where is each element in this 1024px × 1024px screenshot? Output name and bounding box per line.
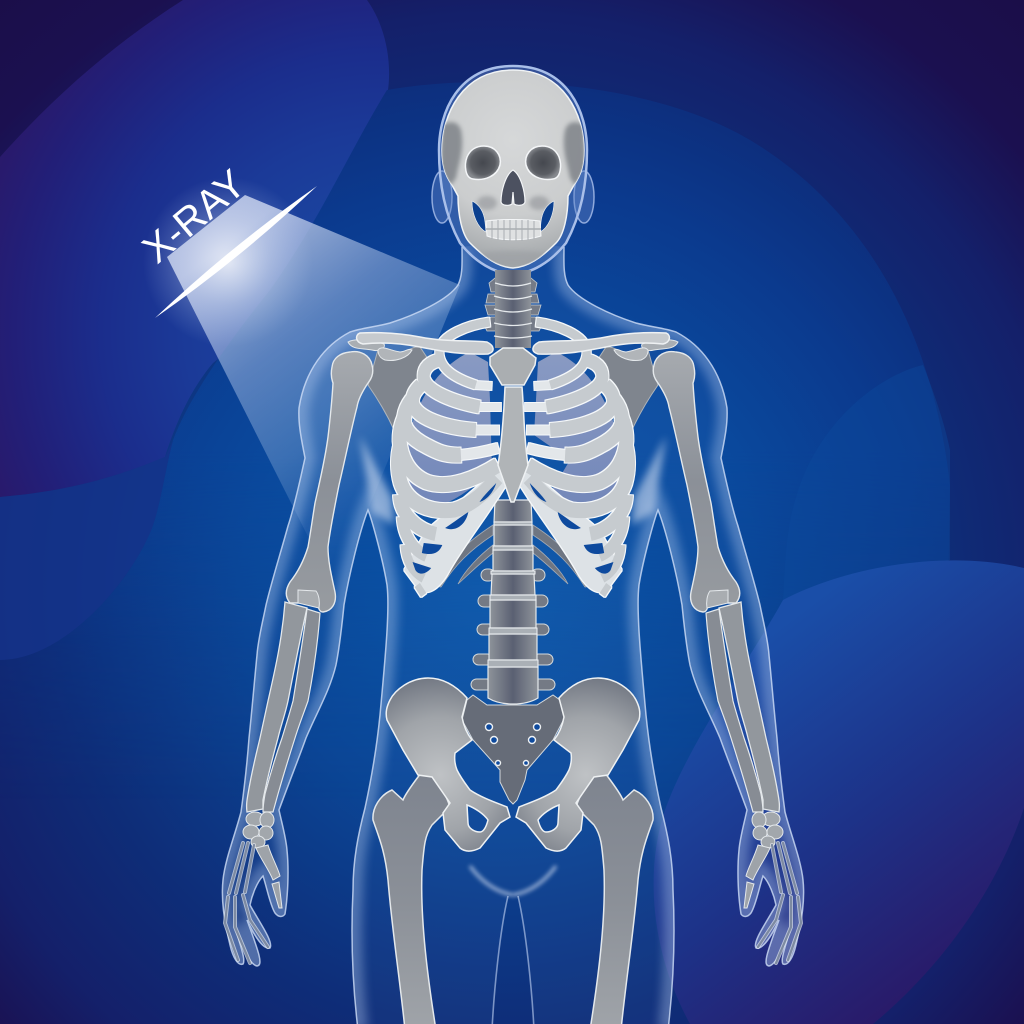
background blob: bottom right [654,560,1024,1024]
pelvis: right hip bone [516,678,640,851]
label: X-RAY: X-RAY [135,162,254,272]
sternum [490,348,536,502]
ulna [263,609,320,812]
background blob: large centre [114,82,950,597]
costal cartilage [404,468,506,592]
intervertebral discs [488,522,538,667]
thumb bones [256,845,282,908]
eye sockets [465,146,561,179]
lung: left [402,352,492,510]
nasal cavity [501,170,525,205]
metacarpals and fingers [225,843,268,963]
skull shading [440,122,586,265]
background blob: right [783,365,950,600]
background blob: lower left lobe [0,440,173,660]
skull [440,70,586,268]
radius [247,602,307,812]
clavicle: right [533,333,669,354]
head outline and ears [432,66,594,274]
teeth [486,220,541,241]
x-ray slit [143,177,317,347]
arm bones: right [653,352,801,963]
arm bones: left [225,352,373,963]
trochlea [298,590,319,608]
femur: left [373,774,450,1024]
background blob: top left [0,0,389,497]
clavicle: left [357,333,493,354]
lung: right [534,352,624,511]
humerus [286,352,373,612]
x-ray beam [167,195,460,590]
rib cage [398,322,628,595]
thoracic and lumbar vertebrae [488,500,538,704]
bony ribs [398,322,498,595]
carpals [243,812,274,848]
sacrum [462,695,565,804]
transverse processes [471,569,555,690]
pelvis: left hip bone [386,678,510,851]
cartilage segments [460,385,501,455]
jaw gaps [472,201,554,232]
femur: right [576,774,653,1024]
back ribs: right side [533,510,614,587]
body silhouette [200,240,826,1024]
cervical vertebrae [484,270,542,348]
scapula: left [348,340,432,432]
back ribs [412,510,493,587]
spine [471,270,555,704]
cartilage gaps [413,483,496,574]
scapula: right [594,340,678,432]
